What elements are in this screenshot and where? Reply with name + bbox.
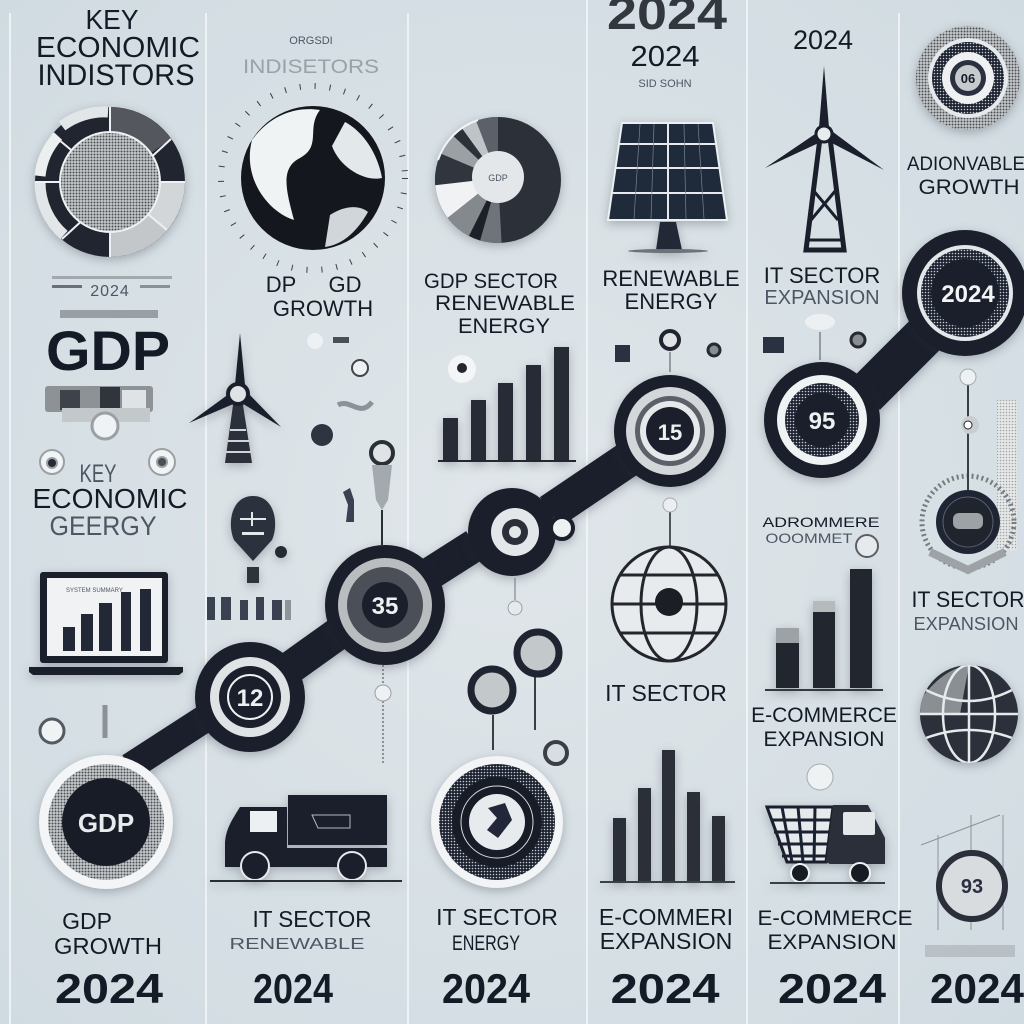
icon: shopping cart truck — [767, 805, 885, 884]
label: IT sector: IT SECTOR — [605, 680, 727, 706]
icon: wind turbine tower — [765, 66, 884, 250]
label: IT sector renewable 2024: RENEWABLE — [230, 936, 364, 953]
label: IT sector energy 2024: ENERGY — [452, 932, 520, 955]
chart: three bars — [765, 569, 883, 691]
heading: key economic energy: ECONOMIC — [32, 483, 187, 514]
timeline node: 95: 95 — [809, 408, 835, 435]
heading: 2024 column 4: 2024 — [630, 41, 700, 73]
label: renewable energy — [602, 266, 740, 314]
label: IT sector expansion: EXPANSION — [764, 287, 880, 309]
label: DP GD growth — [266, 272, 373, 321]
icon: bottom ring chart: 93 — [961, 876, 983, 898]
label: IT sector energy 2024: 2024 — [442, 965, 531, 1012]
label: GDP growth 2024 — [54, 908, 164, 1012]
label: IT sector renewable 2024: 2024 — [253, 965, 334, 1012]
icon: solar panel — [608, 123, 727, 253]
label: additional growth: ADIONVABLE — [907, 154, 1024, 175]
label: GDP growth 2024: GROWTH — [54, 933, 162, 959]
timeline node: 12 — [195, 642, 305, 752]
timeline node: 15 — [614, 375, 726, 487]
heading: 2024 column 4: SID SOHN — [638, 78, 692, 90]
icon: wire globe — [612, 498, 726, 661]
label: e-commerce expansion mid: EXPANSION — [764, 728, 884, 751]
label: IT sector expansion right — [912, 587, 1024, 634]
label: 2024 small with noise rows — [52, 276, 172, 318]
icon: bottom ring chart — [921, 815, 1015, 957]
heading: key economic indicators: INDISTORS — [38, 59, 194, 92]
icon: concentric target — [916, 26, 1020, 130]
label: e-commerce expansion 2024 (col 5) — [758, 907, 912, 1012]
heading: 2024 column 4 — [607, 0, 727, 90]
heading: key economic energy: KEY — [80, 460, 117, 488]
label: DP GD growth: GD — [328, 272, 362, 297]
icon: pie disc: GDP — [488, 173, 508, 183]
icon: laptop bar chart — [29, 572, 183, 675]
label: e-commerce expansion 2024 (col 4): E-COMMERI — [599, 904, 733, 930]
label: adrommerse — [762, 514, 880, 546]
timeline node: small — [468, 488, 573, 576]
label: e-commerce expansion 2024 (col 4) — [599, 904, 733, 1012]
label: 2024 right: 2024 — [930, 965, 1024, 1012]
chart: dark bars — [600, 750, 735, 883]
label: GDP sector renewable energy: ENERGY — [458, 315, 550, 338]
icon: small marks above node 95 — [763, 314, 865, 360]
timeline node: 95 — [764, 362, 880, 478]
label: DP GD growth: DP — [266, 272, 296, 297]
timeline node: 2024 — [902, 230, 1024, 356]
icon: pendant — [375, 665, 391, 765]
label: e-commerce expansion 2024 (col 4): EXPANSION — [600, 928, 732, 954]
growth timeline path — [130, 335, 925, 767]
label: IT sector renewable 2024 — [230, 906, 372, 1012]
label: IT sector energy 2024 — [436, 904, 558, 1012]
chart: rising bars — [438, 347, 576, 462]
label: renewable energy: ENERGY — [625, 289, 718, 314]
label: IT sector renewable 2024: IT SECTOR — [252, 906, 372, 932]
icon: small marks above node 15 — [615, 331, 720, 372]
icon: dark globe — [920, 665, 1018, 763]
heading: key economic energy: GEERGY — [50, 511, 156, 541]
label: IT sector expansion — [764, 263, 880, 309]
icon: laptop bar chart: SYSTEM SUMMARY — [66, 588, 123, 594]
heading: indicators faded: ORGSDI — [289, 35, 333, 47]
label: e-commerce expansion 2024 (col 4): 2024 — [610, 965, 720, 1012]
heading: key economic indicators: KEY — [86, 4, 139, 35]
label: DP GD growth: GROWTH — [273, 296, 373, 321]
icon: pie disc — [428, 105, 561, 250]
icon: small ring — [40, 705, 105, 743]
heading: key economic indicators: ECONOMIC — [36, 32, 200, 64]
heading: 2024 column 5: 2024 — [793, 25, 853, 55]
label: IT sector expansion right: EXPANSION — [914, 614, 1018, 634]
icon: small pin — [448, 355, 476, 383]
timeline node: GDP — [39, 755, 173, 889]
label: e-commerce expansion 2024 (col 5): 2024 — [778, 965, 887, 1012]
icon: small ring right of label — [856, 535, 878, 557]
heading: key economic energy — [32, 460, 187, 541]
label: additional growth: GROWTH — [918, 176, 1020, 199]
timeline node: bottom ring — [431, 756, 563, 888]
label: 2024 small with noise rows: 2024 — [90, 283, 130, 300]
label: IT sector expansion: IT SECTOR — [764, 263, 880, 288]
icon: small pendant under node — [508, 578, 522, 615]
label: e-commerce expansion mid — [751, 704, 897, 751]
icon: concentric target: 06 — [961, 71, 975, 86]
heading: key economic indicators — [36, 4, 200, 92]
timeline node: 35: 35 — [372, 593, 398, 620]
icon: wind turbine small — [189, 333, 281, 463]
label: IT sector energy 2024: IT SECTOR — [436, 904, 558, 930]
icon: delivery truck — [210, 795, 402, 882]
icon: ring with gauge bar — [922, 369, 1017, 570]
timeline node: 15: 15 — [658, 420, 682, 445]
icon: balloon — [231, 496, 287, 583]
label: e-commerce expansion mid: E-COMMERCE — [751, 704, 897, 727]
label: adrommerse: ADROMMERE — [762, 514, 880, 530]
heading: GDP: GDP — [46, 319, 170, 382]
label: GDP sector renewable energy — [424, 270, 575, 338]
timeline node: 2024: 2024 — [941, 281, 995, 308]
label: additional growth — [907, 154, 1024, 199]
icon: blob above cart — [807, 764, 833, 790]
timeline node: GDP: GDP — [78, 808, 134, 838]
icon: medallions — [40, 449, 175, 475]
icon: globe — [221, 86, 405, 270]
icon: segmented circle — [35, 107, 185, 257]
icon: small bars row — [207, 597, 291, 620]
timeline node: 35 — [325, 545, 445, 665]
icon: small linked rings — [471, 632, 567, 764]
icon: assorted marks — [307, 333, 393, 545]
label: GDP sector renewable energy: GDP SECTOR — [424, 270, 558, 293]
label: GDP growth 2024: 2024 — [55, 965, 164, 1012]
label: adrommerse: OOOMMET — [766, 530, 853, 546]
heading: indicators faded — [243, 35, 379, 78]
icon: small gdp graphic — [45, 386, 153, 439]
label: renewable energy: RENEWABLE — [602, 266, 740, 291]
label: GDP growth 2024: GDP — [62, 908, 112, 934]
timeline node: 12: 12 — [237, 685, 263, 712]
label: GDP sector renewable energy: RENEWABLE — [435, 292, 575, 315]
label: e-commerce expansion 2024 (col 5): E-COMMERCE — [758, 907, 912, 930]
heading: indicators faded: INDISETORS — [243, 57, 379, 78]
label: e-commerce expansion 2024 (col 5): EXPANSION — [768, 931, 896, 954]
